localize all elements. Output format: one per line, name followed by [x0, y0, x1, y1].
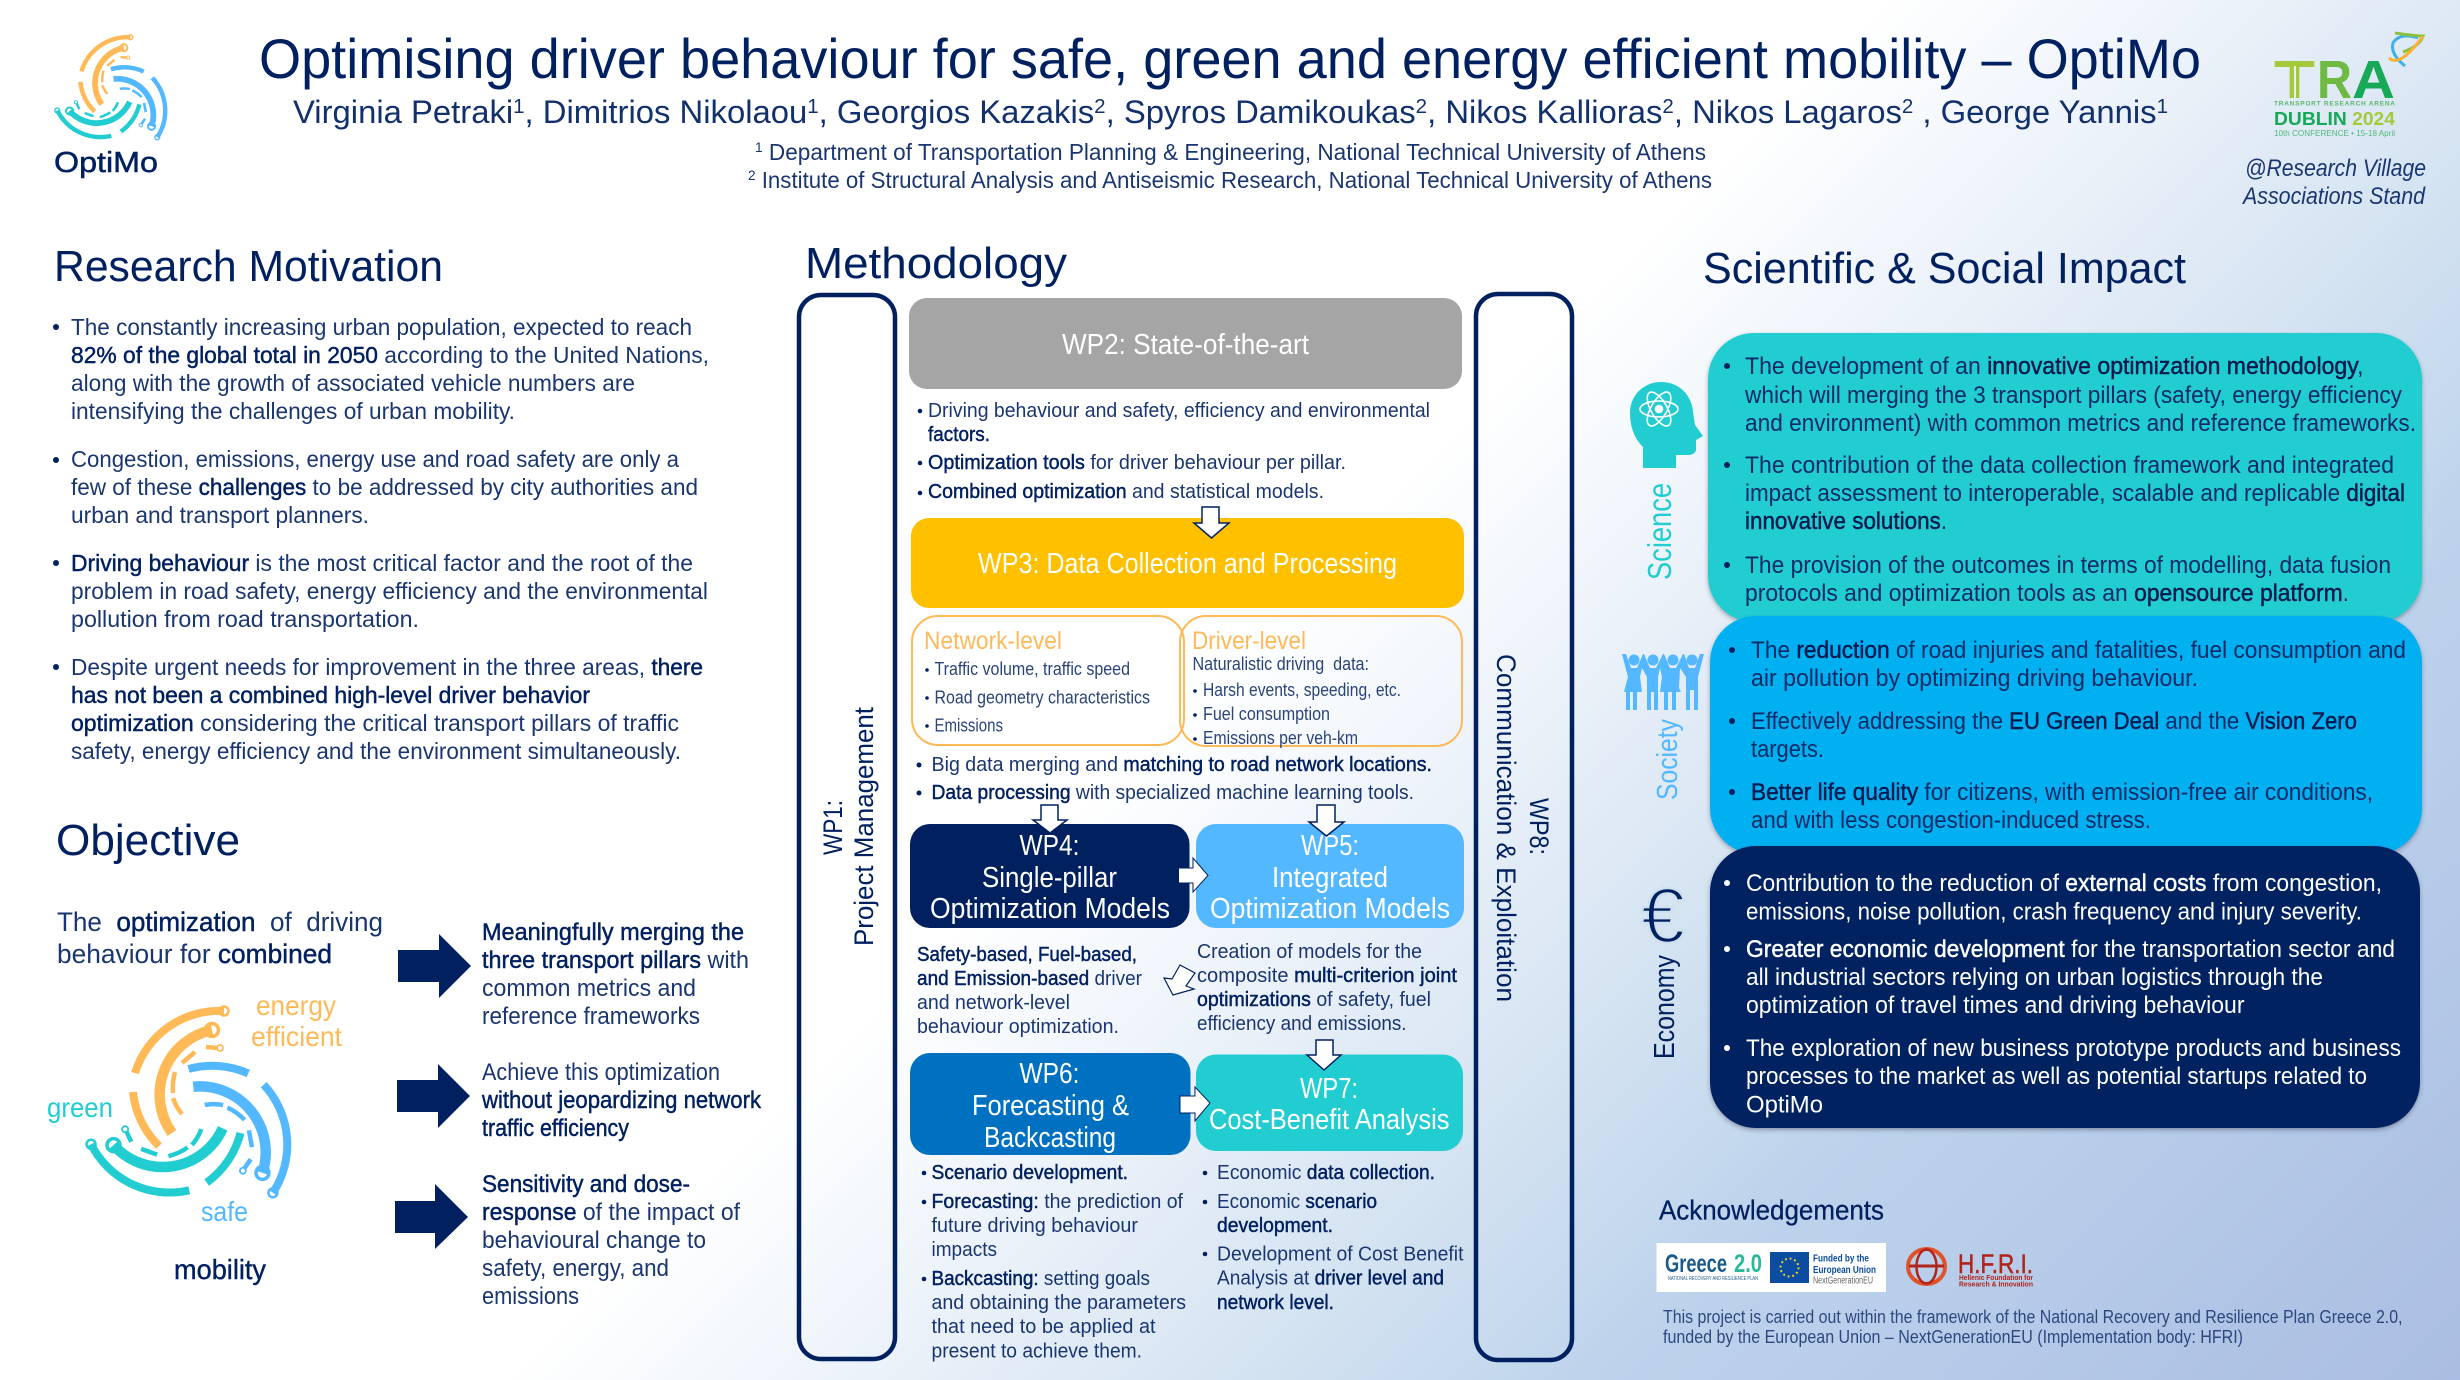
heading: Methodology: Methodology [805, 239, 1067, 288]
text block: WP4 description: and network-level [917, 991, 1070, 1014]
logo: Greece 2.0 and EU funding: NextGenerationEU [1813, 1276, 1873, 1286]
arrow: WP5 to WP4 description [1164, 965, 1195, 995]
text block: WP6 bullets: Scenario development. [932, 1161, 1128, 1184]
panel: Science: innovative solutions. [1745, 508, 1947, 535]
icon: TRA Dublin 2024 logo [2274, 33, 2423, 138]
text block: objective intro: The optimization of driving [57, 907, 383, 937]
text block: research motivation bullets: urban and transport planners. [71, 502, 369, 528]
text block: objective 3: behavioural change to [482, 1227, 706, 1254]
text block: objective 2 [481, 1059, 762, 1142]
text block: WP3 bullets: Big data merging and matching to road network locations. [932, 753, 1432, 776]
text block: WP6 bullets: Backcasting: setting goals [932, 1267, 1150, 1290]
authors: 2 [1902, 96, 1913, 118]
arrow: WP6 to WP7 [1180, 1087, 1210, 1121]
panel: WP4 [910, 824, 1190, 928]
arrow: objective 3 [395, 1184, 468, 1249]
text block: WP7 bullets [1203, 1161, 1464, 1314]
icon: TRA Dublin 2024 logo: A [2352, 50, 2395, 110]
text block: WP7 bullets: Development of Cost Benefit [1217, 1242, 1464, 1266]
text block: WP5 description: Creation of models for the [1197, 940, 1422, 963]
panel: Driver-level data: Harsh events, speeding, etc. [1203, 679, 1401, 700]
authors: 1 [2157, 96, 2168, 118]
authors: , Spyros Damikoukas [1106, 94, 1416, 130]
arrow: WP2 to WP3 [1194, 507, 1229, 538]
panel: WP8 Communication and Exploitation [1476, 294, 1572, 1360]
text block: WP7 bullets: network level. [1217, 1291, 1334, 1314]
panel: Society: air pollution by optimizing driving behaviour. [1751, 665, 2198, 692]
text block: research motivation bullets: has not been a combined high-level driver behavior [71, 682, 590, 708]
panel: Society: and with less congestion-induced stress. [1751, 807, 2151, 834]
panel: WP2 header [909, 298, 1462, 389]
text block: WP5 description: optimizations of safety, fuel [1197, 988, 1431, 1011]
text block: WP6 bullets: that need to be applied at [932, 1315, 1156, 1338]
text block: WP2 bullets [918, 399, 1430, 503]
icon: TRA Dublin 2024 logo: 10th CONFERENCE • 15-18 April [2274, 129, 2395, 138]
panel: Network-level data: Traffic volume, traffic speed [934, 658, 1130, 679]
icon: science head with atom [1630, 382, 1703, 468]
panel: Economy: optimization of travel times and driving behaviour [1746, 992, 2245, 1019]
authors: 1 [807, 96, 819, 118]
logo: Greece 2.0 and EU funding: Greece [1665, 1250, 1727, 1278]
text block: objective 2: traffic efficiency [482, 1115, 629, 1142]
panel: Network-level data: Road geometry characteristics [934, 686, 1150, 708]
panel: Society: Better life quality for citizens, with emission-free air conditions, [1751, 779, 2373, 806]
text block: research motivation bullets: The constantly increasing urban population, expected to reach [71, 314, 692, 340]
logo: Greece 2.0 and EU funding [1656, 1243, 1886, 1292]
text block: WP2 bullets: Combined optimization and statistical models. [928, 480, 1324, 503]
panel: Science: The development of an innovative optimization methodology, [1745, 353, 2364, 380]
icon: TRA Dublin 2024 logo: T [2274, 50, 2315, 110]
arrow: objective 2 [397, 1064, 470, 1128]
venue note: @Research Village [2245, 155, 2426, 182]
arrow: to WP5 [1309, 805, 1344, 836]
icon: TRA Dublin 2024 logo: DUBLIN 2024 [2274, 109, 2395, 129]
affiliations [748, 139, 1712, 193]
authors: 2 [1662, 96, 1674, 118]
text block: WP4 description: and Emission-based driver [917, 967, 1142, 990]
panel: Driver-level data: Naturalistic driving data: [1192, 653, 1369, 674]
panel: WP6: Backcasting [984, 1122, 1116, 1154]
text block: research motivation bullets: Driving behaviour is the most critical factor and the root of the [71, 550, 693, 576]
authors: , George Yannis [1913, 94, 2157, 130]
panel: WP6: Forecasting & [972, 1090, 1129, 1122]
panel: Science: The provision of the outcomes in terms of modelling, data fusion [1745, 552, 2391, 579]
text block: WP6 bullets: impacts [932, 1238, 997, 1261]
panel: Driver-level data [1180, 616, 1462, 748]
logo: Greece 2.0 and EU funding: NATIONAL RECOVERY AND RESILIENCE PLAN [1668, 1276, 1758, 1282]
text block: WP2 bullets: Driving behaviour and safety, efficiency and environmental [928, 399, 1430, 422]
panel: WP6: WP6: [1020, 1058, 1080, 1090]
panel: Science: and environment) with common metrics and reference frameworks. [1745, 410, 2416, 437]
panel: WP5 [1196, 824, 1464, 928]
logo: Greece 2.0 and EU funding: 2.0 [1734, 1250, 1762, 1278]
panel: WP5: WP5: [1301, 830, 1359, 862]
label: Society: Society [1652, 719, 1684, 800]
text block: objective intro: behaviour for combined [57, 939, 332, 969]
panel: Driver-level data: Driver-level [1192, 627, 1306, 655]
icon: OptiMo logo [54, 35, 184, 155]
affiliations: 1 [755, 139, 763, 155]
panel: WP3 header: WP3: Data Collection and Processing [978, 548, 1397, 580]
arrow: objective 1 [398, 934, 471, 998]
venue note: Associations Stand [2241, 183, 2426, 210]
panel: Science [1708, 333, 2422, 622]
heading: Scientific and Social Impact: Scientific & Social Impact [1703, 244, 2186, 293]
title: Optimising driver behaviour for safe, green and energy efficient mobility – OptiMo [259, 27, 2201, 90]
logo: H.F.R.I.: Research & Innovation [1959, 1282, 2033, 1288]
label: energy efficient [251, 990, 342, 1052]
logo: H.F.R.I.: Hellenic Foundation for [1959, 1275, 2033, 1282]
text block: funding note [1663, 1307, 2402, 1347]
logo: Greece 2.0 and EU funding: Funded by the [1813, 1254, 1869, 1264]
icon: society people [1622, 654, 1704, 710]
panel: Science: which will merging the 3 transport pillars (safety, energy efficiency [1744, 382, 2402, 409]
text block: research motivation bullets: problem in road safety, energy efficiency and the environmental [71, 578, 708, 604]
text block: WP7 bullets: development. [1217, 1214, 1333, 1237]
panel: WP1 Project Management: Project Management [849, 707, 879, 946]
text block: WP6 bullets: Forecasting: the prediction of [932, 1190, 1183, 1213]
text block: research motivation bullets: optimization considering the critical transport pillars of traffic [71, 710, 679, 736]
text block: WP4 description: Safety-based, Fuel-based, [917, 943, 1137, 966]
panel: Science: The contribution of the data collection framework and integrated [1745, 452, 2394, 479]
logo: Greece 2.0 and EU funding: European Union [1813, 1265, 1876, 1276]
authors: , Nikos Kallioras [1427, 94, 1662, 130]
text block: WP5 description: composite multi-criterion joint [1197, 964, 1457, 987]
label: Science: Science [1641, 483, 1678, 580]
heading: Research Motivation: Research Motivation [54, 242, 443, 291]
authors: 2 [1416, 96, 1427, 118]
arrow: to WP4 [1033, 805, 1067, 833]
panel: Society: The reduction of road injuries and fatalities, fuel consumption and [1751, 637, 2406, 664]
panel: Economy: emissions, noise pollution, crash frequency and injury severity. [1746, 898, 2362, 926]
text block: objective 3 [482, 1171, 740, 1310]
text block: objective 1: Meaningfully merging the [482, 919, 744, 946]
heading: Acknowledgements: Acknowledgements [1659, 1194, 1884, 1226]
panel: Economy: Contribution to the reduction of external costs from congestion, [1746, 870, 2382, 897]
panel: Economy: all industrial sectors relying on urban logistics through the [1746, 964, 2323, 991]
icon: TRA Dublin 2024 logo: TRANSPORT RESEARCH ARENA [2274, 100, 2395, 108]
text block: WP4 description: behaviour optimization. [917, 1015, 1119, 1038]
authors: , Nikos Lagaros [1674, 94, 1902, 130]
icon: TRA Dublin 2024 logo: R [2317, 50, 2352, 110]
logo wordmark: OptiMo [54, 147, 158, 179]
icon: large spiral logo [85, 1006, 322, 1225]
text block: research motivation bullets: pollution from road transportation. [71, 606, 419, 632]
text block: objective intro [57, 907, 383, 969]
panel: WP8 Communication and Exploitation: WP8: [1524, 798, 1554, 855]
panel: Economy: Greater economic development for the transportation sector and [1746, 936, 2395, 963]
text block: WP6 bullets: future driving behaviour [932, 1214, 1138, 1237]
text block: objective 2: Achieve this optimization [482, 1059, 720, 1086]
authors: , Dimitrios Nikolaou [525, 94, 807, 130]
panel: Economy: OptiMo [1746, 1092, 1823, 1118]
panel: WP7: WP7: [1300, 1073, 1358, 1105]
panel: Science: protocols and optimization tools as an opensource platform. [1745, 580, 2349, 607]
affiliations: 2 [748, 167, 756, 183]
panel: WP6 [910, 1053, 1190, 1155]
label: energy efficient: efficient [251, 1021, 342, 1052]
text block: funding note: funded by the European Union – NextGenerationEU (Implementation body: HFRI) [1663, 1327, 2243, 1347]
panel: WP5: Integrated [1272, 862, 1388, 894]
label: safe: safe [201, 1196, 248, 1227]
text block: WP5 description [1197, 940, 1457, 1035]
text block: objective 1: common metrics and [482, 975, 696, 1002]
text block: WP3 bullets: Data processing with specialized machine learning tools. [932, 781, 1414, 804]
heading: Objective: Objective [56, 816, 240, 865]
panel: Economy [1710, 846, 2420, 1128]
panel: WP4: WP4: [1020, 830, 1080, 862]
panel: Driver-level data: Fuel consumption [1203, 703, 1330, 724]
text block: research motivation bullets: Congestion, emissions, energy use and road safety are only a [71, 446, 679, 472]
label: energy efficient: energy [256, 990, 336, 1021]
authors: 1 [513, 96, 525, 118]
panel: Economy: The exploration of new business prototype products and business [1746, 1035, 2401, 1062]
text block: objective 1 [482, 919, 749, 1030]
affiliations: Department of Transportation Planning & Engineering, National Technical University of Athens [763, 139, 1706, 165]
affiliations: Institute of Structural Analysis and Antiseismic Research, National Technical University of Athens [756, 167, 1712, 193]
text block: WP6 bullets: present to achieve them. [932, 1340, 1142, 1362]
panel: WP1 Project Management: WP1: [818, 800, 848, 855]
label: green: green [47, 1092, 113, 1123]
panel: Driver-level data: Emissions per veh-km [1203, 727, 1358, 748]
panel: Society: targets. [1751, 736, 1824, 763]
text block: objective 1: reference frameworks [482, 1003, 700, 1030]
panel: WP3 header [911, 518, 1464, 608]
text block: research motivation bullets: 82% of the global total in 2050 according to the United Nations, [71, 342, 709, 368]
panel: WP8 Communication and Exploitation: Communication & Exploitation [1491, 654, 1521, 1002]
text block: research motivation bullets: few of these challenges to be addressed by city authorities and [71, 474, 698, 500]
panel: WP7 [1196, 1054, 1463, 1151]
panel: Network-level data: Network-level [924, 627, 1062, 655]
panel: Society: Effectively addressing the EU Green Deal and the Vision Zero [1751, 708, 2357, 735]
text block: research motivation bullets: along with the growth of associated vehicle numbers are [71, 370, 635, 396]
authors: Virginia Petraki [293, 94, 508, 130]
text block: objective 3: emissions [482, 1283, 579, 1310]
authors: , Georgios Kazakis [819, 94, 1094, 130]
panel: Network-level data: Emissions [934, 714, 1003, 736]
panel: WP1 Project Management [799, 295, 895, 1359]
panel: Society [1710, 616, 2422, 854]
text block: objective 3: safety, energy, and [482, 1255, 669, 1282]
text block: WP4 description [917, 943, 1142, 1038]
text block: WP6 bullets: and obtaining the parameters [932, 1291, 1186, 1314]
panel: Science: impact assessment to interoperable, scalable and replicable digital [1745, 480, 2405, 507]
text block: objective 2: without jeopardizing network [481, 1087, 762, 1114]
panel: WP5: Optimization Models [1210, 893, 1450, 925]
label: mobility: mobility [174, 1254, 266, 1285]
text block: research motivation bullets: Despite urgent needs for improvement in the three areas, there [71, 654, 703, 680]
panel: Network-level data [912, 616, 1184, 745]
text block: objective 3: Sensitivity and dose- [482, 1171, 690, 1198]
text block: WP3 bullets [916, 753, 1432, 804]
venue note [2241, 155, 2426, 210]
label: Economy: Economy [1649, 955, 1681, 1059]
text block: WP7 bullets: Analysis at driver level and [1217, 1266, 1444, 1290]
text block: WP7 bullets: Economic scenario [1217, 1190, 1377, 1213]
text block: research motivation bullets [53, 314, 709, 764]
text block: WP2 bullets: factors. [928, 423, 990, 446]
text block: WP5 description: efficiency and emissions. [1197, 1012, 1406, 1035]
panel: Economy: processes to the market as well as potential startups related to [1746, 1063, 2367, 1090]
text block: WP2 bullets: Optimization tools for driver behaviour per pillar. [928, 451, 1346, 474]
text block: WP6 bullets [922, 1161, 1186, 1362]
text block: research motivation bullets: safety, energy efficiency and the environment simultaneously. [71, 738, 681, 764]
icon: euro: € [1641, 871, 1685, 959]
authors: 2 [1094, 96, 1106, 118]
text block: research motivation bullets: intensifying the challenges of urban mobility. [71, 398, 515, 424]
panel: WP2 header: WP2: State-of-the-art [1062, 329, 1309, 361]
text block: objective 1: three transport pillars with [482, 947, 749, 974]
text block: objective 3: response of the impact of [482, 1199, 740, 1226]
logo: H.F.R.I. [1908, 1249, 2033, 1288]
panel: WP7: Cost-Benefit Analysis [1209, 1104, 1450, 1136]
panel: WP4: Single-pillar [982, 862, 1117, 894]
text block: WP7 bullets: Economic data collection. [1217, 1161, 1435, 1184]
arrow: WP5 to WP7 [1307, 1040, 1341, 1070]
logo: H.F.R.I.: H.F.R.I. [1958, 1249, 2033, 1279]
panel: WP4: Optimization Models [930, 893, 1170, 925]
arrow: WP4 to WP5 [1178, 858, 1208, 892]
